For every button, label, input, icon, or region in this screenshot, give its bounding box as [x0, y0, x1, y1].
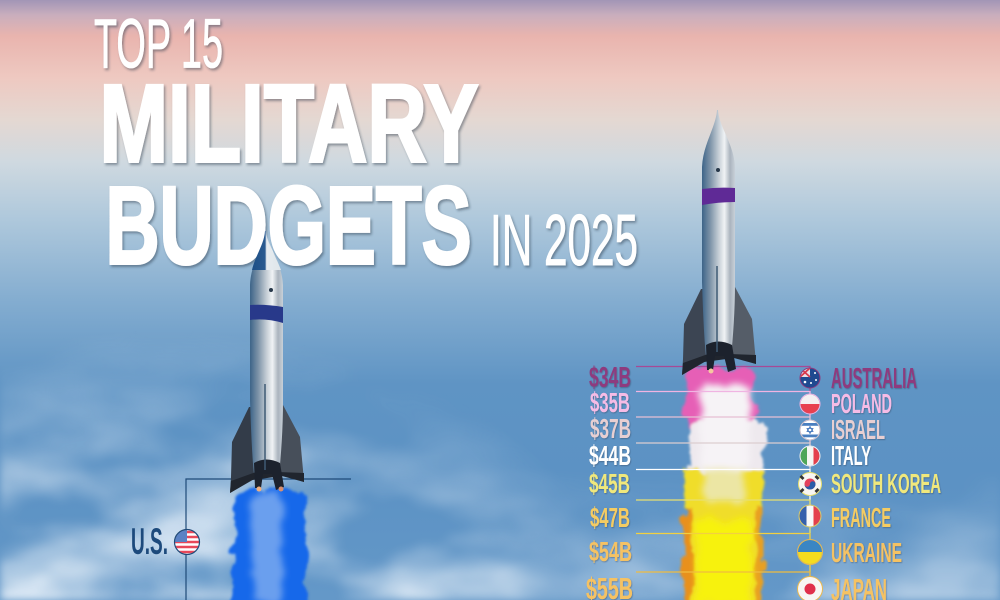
title: MILITARY: [100, 62, 478, 186]
flag: Poland: [800, 394, 820, 414]
row: Israel $37B: $37B: [590, 413, 631, 444]
row: South Korea $45B: [589, 468, 941, 499]
title: TOP 15: [94, 4, 223, 82]
row: South Korea $45B: $45B: [589, 468, 630, 499]
row: France $47B: [590, 502, 891, 533]
row: Japan $55B: [586, 571, 887, 600]
row: Poland $35B: POLAND: [831, 388, 892, 419]
row: Israel $37B: ISRAEL: [831, 414, 885, 445]
rocket: multi-colour: [682, 110, 756, 375]
row: Australia $34B: AUSTRALIA: [831, 363, 917, 395]
flag: France: [799, 505, 822, 527]
row: Ukraine $54B: [589, 536, 902, 568]
flag: Australia: [800, 368, 820, 388]
row: Poland $35B: [590, 387, 892, 419]
row: Italy $44B: ITALY: [831, 440, 871, 471]
flame: U.S. rocket exhaust: [233, 490, 305, 600]
clouds: [0, 352, 1000, 600]
rocket nose over title: [252, 231, 281, 270]
row: Australia $34B: [589, 362, 917, 395]
row: Italy $44B: [589, 440, 871, 471]
row: Poland $35B: $35B: [590, 387, 630, 418]
flag: Italy: [800, 446, 820, 466]
connector lines: other countries: [636, 366, 810, 600]
title: [94, 4, 638, 288]
row: France $47B: FRANCE: [831, 502, 891, 533]
row: Ukraine $54B: $54B: [589, 536, 632, 567]
row: Italy $44B: $44B: [589, 440, 631, 471]
flag: Israel: [800, 420, 820, 440]
flag: South Korea: [798, 472, 822, 496]
row: Ukraine $54B: UKRAINE: [831, 537, 902, 568]
flag: U.S.: [175, 530, 199, 554]
title: BUDGETS: [106, 164, 472, 288]
row: France $47B: $47B: [590, 502, 630, 533]
flame: multi-colour rocket exhaust: [684, 368, 764, 600]
title: IN 2025: [490, 201, 638, 281]
flag: Japan: [798, 576, 822, 600]
flag: Ukraine: [798, 540, 822, 564]
rocket: U.S.: [230, 231, 304, 493]
connector lines: U.S.: [186, 479, 351, 600]
label: U.S.: [132, 528, 200, 556]
row: Israel $37B: [590, 413, 885, 445]
row: Australia $34B: $34B: [589, 362, 631, 394]
label: U.S.: U.S.: [131, 521, 168, 562]
